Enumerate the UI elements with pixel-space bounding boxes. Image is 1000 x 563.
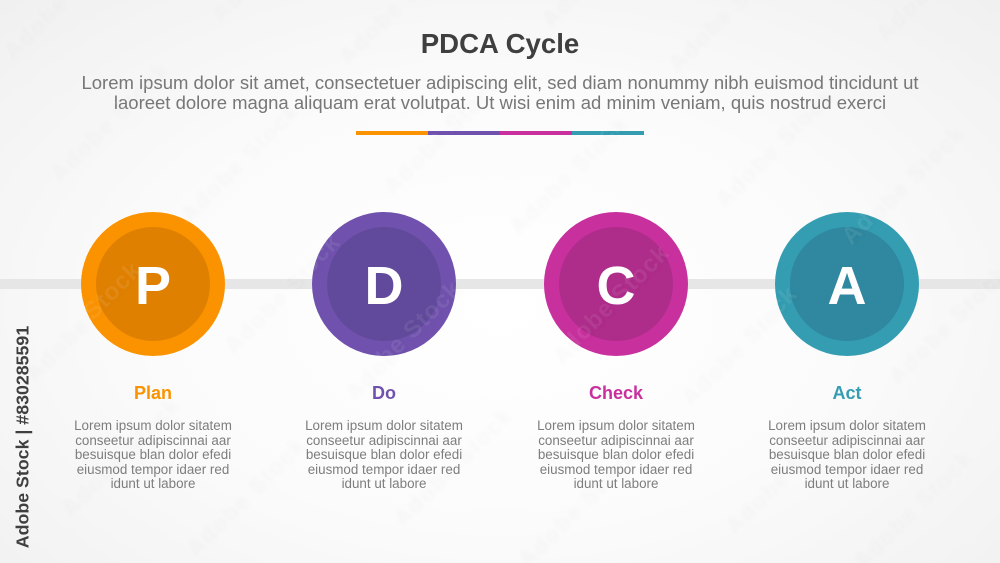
diagonal stock watermarks: Adobe Stock [836,119,967,250]
title underline [356,131,644,135]
text: Act: Lorem ipsum dolor sitatem [768,418,926,433]
subtitle text: laoreet dolore magna aliquam erat volutpat. Ut wisi enim ad minim veniam, quis nostrud exerci [114,92,886,113]
stock watermark side text: Adobe Stock | #830285591 [12,326,32,548]
text: Check: besuisque blan dolor efedi [538,447,694,462]
text: Do [305,418,463,491]
diagonal stock watermarks: Adobe Stock [672,280,803,411]
diagonal stock watermarks: Adobe Stock [374,69,505,200]
subtitle text [81,72,919,113]
circle: Do [312,212,456,356]
diagonal stock watermarks: Adobe Stock [16,256,147,387]
diagonal stock watermarks: Adobe Stock [384,401,515,532]
text: Do: eiusmod tempor idaer red [308,462,460,477]
text: Do: idunt ut labore [342,476,426,491]
text: Do: conseetur adipiscinnai aar [306,433,462,448]
text: Check: conseetur adipiscinnai aar [538,433,694,448]
circle: Act: A [828,256,866,316]
diagonal stock watermarks: Adobe Stock [336,275,467,406]
diagonal stock watermarks: Adobe Stock [500,109,631,240]
text: Check: Lorem ipsum dolor sitatem [537,418,695,433]
diagonal stock watermarks: Adobe Stock [215,228,346,359]
subtitle text: Lorem ipsum dolor sit amet, consectetuer adipiscing elit, sed diam nonummy nibh euismod tincidunt ut [81,72,919,93]
circle: Do: D [364,256,404,316]
text: Check: eiusmod tempor idaer red [540,462,692,477]
text: Do: besuisque blan dolor efedi [306,447,462,462]
diagonal stock watermarks: Adobe Stock [716,409,847,540]
heading: Plan: Plan [134,383,172,403]
text: Do: Lorem ipsum dolor sitatem [305,418,463,433]
text: Act: eiusmod tempor idaer red [771,462,923,477]
text: Plan: Lorem ipsum dolor sitatem [74,418,232,433]
circle: Act [775,212,919,356]
text: Plan: idunt ut labore [111,476,195,491]
diagonal stock watermarks: Adobe Stock [52,391,183,522]
text: Act: besuisque blan dolor efedi [769,447,925,462]
text: Check: idunt ut labore [574,476,658,491]
text: Act: conseetur adipiscinnai aar [769,433,925,448]
text: Act: idunt ut labore [805,476,889,491]
text: Plan [74,418,232,491]
text: Act [768,418,926,491]
heading: Do: Do [372,383,396,403]
diagonal stock watermarks: Adobe Stock [177,431,308,562]
diagonal stock watermarks: Adobe Stock [171,97,302,228]
diagonal stock watermarks: Adobe Stock [544,239,675,370]
diagonal stock watermarks: Adobe Stock [41,56,172,187]
title: PDCA Cycle [421,28,579,59]
text: Plan: eiusmod tempor idaer red [77,462,229,477]
text: Plan: besuisque blan dolor efedi [75,447,231,462]
circle: Check [544,212,688,356]
heading: Act: Act [832,383,862,403]
heading: Check: Check [589,383,643,403]
circle: Plan [81,212,225,356]
text: Plan: conseetur adipiscinnai aar [75,433,231,448]
timeline line [0,279,1000,289]
diagonal stock watermarks: Adobe Stock [706,82,837,213]
circle: Check: C [596,256,636,316]
text: Check [537,418,695,491]
circle: Plan: P [135,256,171,316]
